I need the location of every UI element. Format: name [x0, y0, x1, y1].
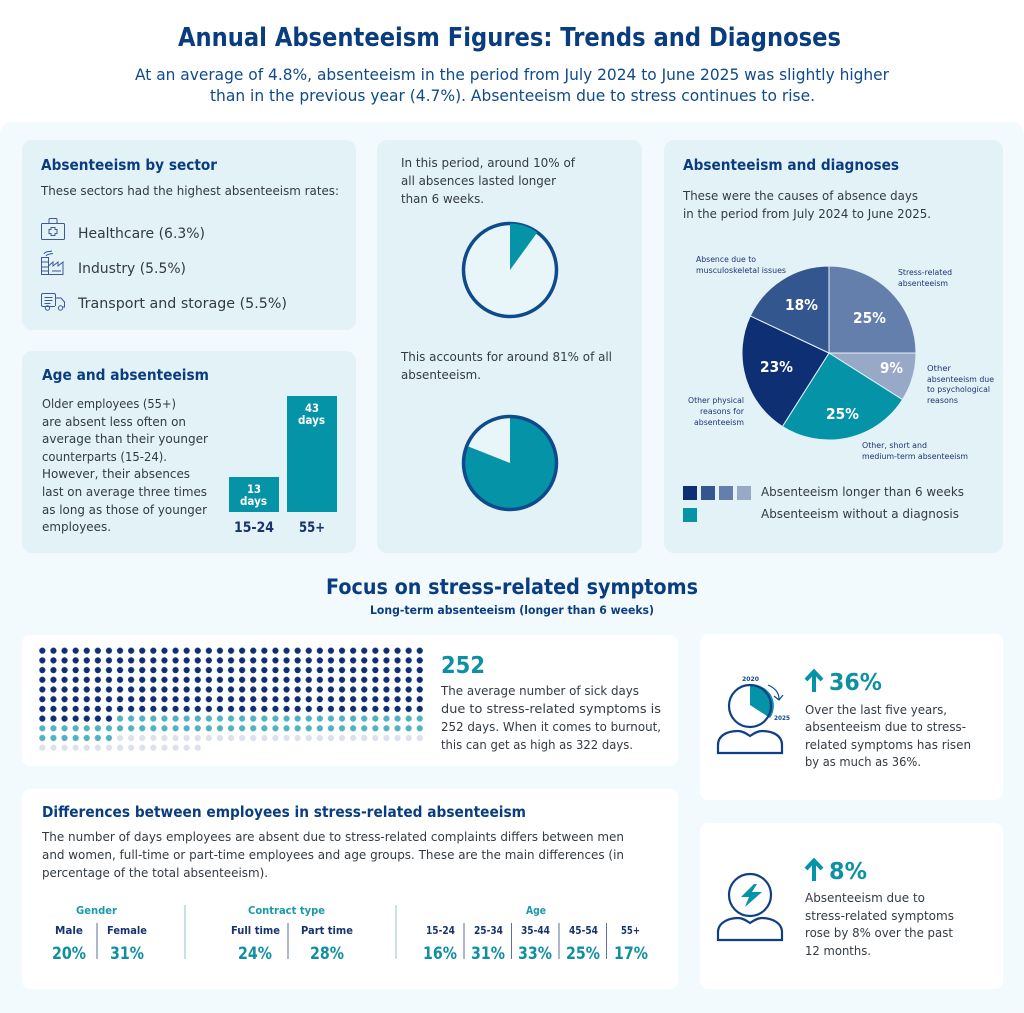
text: sick days: 252 days. When it comes to burnout,	[441, 719, 661, 734]
icon: person with lightning	[718, 874, 782, 940]
text: 12 months	[805, 890, 954, 958]
pie percentages: 9%	[880, 359, 903, 377]
age text: are absent less often on	[42, 414, 186, 429]
chart: 10 percent	[464, 224, 556, 316]
age text: average than their younger	[42, 431, 209, 446]
pie labels: Absence due to	[696, 254, 756, 264]
icon: person with clock: 2025	[774, 714, 790, 722]
section heading: focus: Long-term absenteeism (longer than 6 weeks)	[370, 603, 654, 617]
table: age: 17%	[614, 944, 648, 963]
age text	[42, 396, 209, 534]
diagnoses intro: in the period from July 2024 to June 2025.	[683, 206, 931, 221]
differences text: percentage of the total absenteeism).	[42, 865, 268, 880]
legend: Absenteeism without a diagnosis	[761, 506, 959, 521]
pie percentages: 23%	[760, 358, 793, 376]
heading: sector: Absenteeism by sector	[41, 156, 217, 174]
text: 12 months: rose by 8% over the past	[805, 925, 953, 940]
pie percentages	[760, 296, 903, 423]
table: gender: Male	[55, 924, 83, 937]
age text: employees.	[42, 519, 111, 534]
text: 12 months: stress-related symptoms	[805, 908, 954, 923]
text: five years: by as much as 36%.	[805, 754, 921, 769]
icon: person with clock: 2020	[742, 675, 759, 683]
differences text: The number of days employees are absent due to stress-related complaints differs between men	[41, 829, 624, 844]
pie labels: musculoskeletal issues	[696, 265, 786, 275]
icon: person with clock	[718, 675, 790, 753]
text: five years: related symptoms has risen	[805, 737, 971, 752]
text: 12 months: Absenteeism due to	[805, 890, 925, 905]
age text: counterparts (15-24).	[42, 449, 167, 464]
panel: 36 percent rise	[700, 634, 1003, 800]
differences text	[41, 829, 624, 880]
pie percentages: 25%	[853, 309, 886, 327]
transport: Transport and storage (5.5%)	[77, 296, 287, 312]
pie labels: reasons	[927, 395, 958, 405]
bar chart: days by age: 43	[305, 401, 319, 415]
table: age: 16%	[423, 944, 457, 963]
pie labels: Stress-related	[898, 267, 952, 277]
intro text: At an average of 4.8%, absenteeism in the period from July 2024 to June 2025 was slightly higher	[135, 65, 889, 84]
panel: 8 percent rise	[700, 823, 1003, 989]
text: sick days: due to stress-related symptoms is	[441, 701, 661, 716]
pie labels: absenteeism	[694, 417, 744, 427]
table: contract type: 24%	[238, 944, 272, 963]
text: five years	[805, 702, 971, 769]
pie labels	[688, 254, 994, 461]
title: Annual Absenteeism Figures: Trends and Diagnoses	[178, 23, 841, 53]
table: age: 15-24	[426, 924, 455, 937]
pie labels: to psychological	[927, 384, 990, 394]
stat: 252: 252	[441, 653, 485, 679]
age text: Older employees (55+)	[42, 396, 176, 411]
pie labels: Other	[927, 363, 952, 373]
bar chart: days by age: 15-24	[234, 520, 274, 536]
age text: However, their absences	[42, 466, 190, 481]
bar chart: days by age: 55+	[299, 520, 325, 536]
table: age	[423, 904, 648, 963]
table: contract type	[231, 904, 353, 963]
stat: 36 percent: 36%	[829, 670, 882, 696]
panel: age and absenteeism	[22, 351, 356, 553]
pie labels: absenteeism due	[927, 374, 994, 384]
panel: absenteeism by sector	[22, 140, 356, 330]
text: 81 percent: absenteeism.	[401, 367, 481, 382]
pie labels: Other physical	[688, 395, 744, 405]
table: age: 31%	[471, 944, 505, 963]
bar chart: days by age: days	[298, 413, 325, 427]
diagnoses intro	[682, 188, 931, 221]
table: age: 35-44	[521, 924, 550, 937]
differences text: and women, full-time or part-time employees and age groups. These are the main differences (in	[42, 847, 624, 862]
pie labels: Other, short and	[862, 440, 927, 450]
section heading: focus	[326, 575, 698, 617]
arrow up	[806, 860, 822, 881]
bar chart: days by age: 13	[247, 482, 261, 496]
table: gender: 31%	[110, 944, 144, 963]
healthcare: Healthcare (6.3%)	[78, 226, 205, 242]
pie labels: medium-term absenteeism	[862, 451, 968, 461]
text: 81 percent: This accounts for around 81% of all	[400, 349, 612, 364]
text: 12 months: 12 months.	[805, 943, 871, 958]
text: five years: absenteeism due to stress-	[805, 719, 966, 734]
text: five years: Over the last five years,	[805, 702, 947, 717]
table: age: 45-54	[569, 924, 598, 937]
text: 10 percent: In this period, around 10% of	[401, 155, 576, 170]
text: sick days	[440, 683, 661, 752]
pie labels: reasons for	[700, 406, 745, 416]
intro text: than in the previous year (4.7%). Absenteeism due to stress continues to rise.	[210, 86, 815, 105]
text: sick days: The average number of sick days	[440, 683, 639, 698]
text: 10 percent: all absences lasted longer	[401, 173, 557, 188]
heading: diagnoses: Absenteeism and diagnoses	[683, 156, 899, 174]
panel: long absences	[377, 140, 642, 553]
text: 10 percent	[401, 155, 576, 206]
table: age: 33%	[518, 944, 552, 963]
table: contract type: Part time	[301, 924, 353, 937]
pie chart	[742, 266, 916, 440]
panel: 252 sick days	[22, 635, 678, 766]
age text: as long as those of younger	[42, 502, 208, 517]
table: age: Age	[526, 904, 546, 917]
sector intro: These sectors had the highest absenteeism rates:	[40, 183, 339, 198]
age text: last on average three times	[42, 484, 207, 499]
panel: differences between employees	[22, 789, 678, 989]
text: sick days: this can get as high as 322 days.	[441, 737, 633, 752]
dot chart	[37, 646, 425, 753]
heading: age: Age and absenteeism	[42, 366, 209, 384]
table: contract type: Full time	[231, 924, 280, 937]
table: gender: 20%	[52, 944, 86, 963]
table: contract type: 28%	[310, 944, 344, 963]
arrow up	[806, 672, 822, 692]
legend: Absenteeism longer than 6 weeks	[761, 484, 964, 499]
table: gender	[52, 904, 147, 963]
pie percentages: 18%	[785, 296, 818, 314]
bar chart: days by age	[229, 396, 337, 536]
table: contract type: Contract type	[248, 904, 325, 917]
chart: 81 percent	[464, 416, 557, 510]
icon: medical case	[42, 218, 64, 240]
heading: differences: Differences between employees in stress-related absenteeism	[42, 803, 526, 821]
intro text	[135, 65, 889, 105]
bar chart: days by age: days	[240, 494, 267, 508]
table: age: 55+	[621, 924, 640, 937]
icon: truck	[42, 294, 64, 310]
pie percentages: 25%	[826, 405, 859, 423]
table: gender: Gender	[76, 904, 118, 917]
section heading: focus: Focus on stress-related symptoms	[326, 575, 698, 600]
table: gender: Female	[107, 924, 147, 937]
text: 81 percent	[400, 349, 612, 382]
diagnoses intro: These were the causes of absence days	[682, 188, 918, 203]
table: age: 25%	[566, 944, 600, 963]
table: age: 25-34	[474, 924, 503, 937]
pie labels: absenteeism	[898, 278, 948, 288]
text: 10 percent: than 6 weeks.	[401, 191, 484, 206]
stat: 8 percent: 8%	[829, 859, 867, 885]
icon: factory	[42, 251, 63, 274]
industry: Industry (5.5%)	[78, 261, 186, 277]
panel: absenteeism and diagnoses	[664, 140, 1003, 553]
legend	[683, 484, 964, 522]
